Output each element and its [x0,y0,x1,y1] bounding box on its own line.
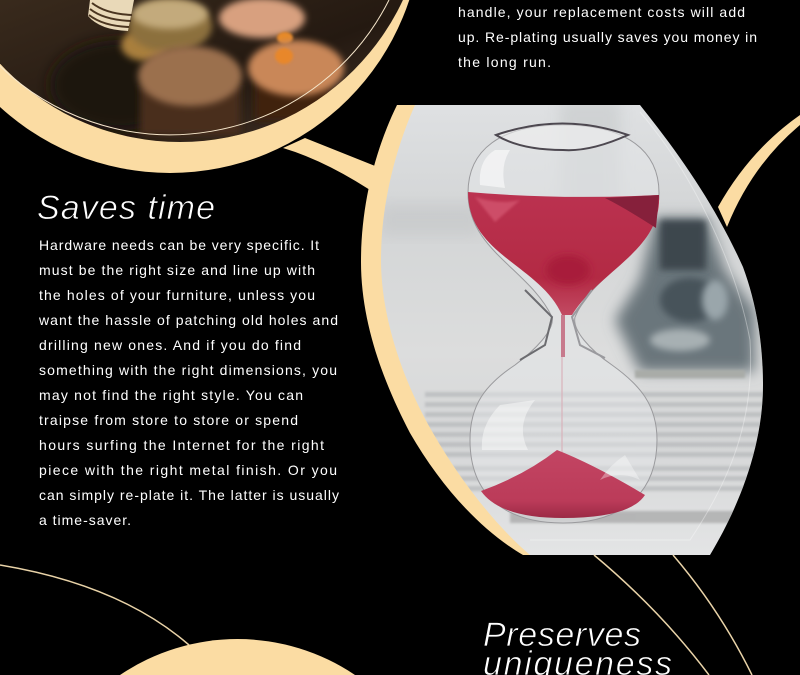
newspaper text stripes [425,392,770,491]
rim [496,124,628,150]
blurred newspaper top [560,105,620,130]
text: saves time body: traipse from store to store or spend [39,412,298,428]
text: saves time body: must be the right size and line up with [39,262,315,278]
text: top right body [458,4,757,70]
cream circle bottom [120,639,355,675]
photo: hourglass [370,100,770,560]
thin line right 2 [673,555,752,675]
connector band [283,138,385,200]
text: top right body: handle, your replacement costs will add [458,4,745,20]
cream crescent right of lens [718,115,800,227]
text: top right body: up. Re-plating usually saves you money in [458,29,757,45]
glass bulbs [468,125,659,523]
hourglass [468,124,659,523]
text: saves time body: can simply re-plate it. The latter is usually [39,487,339,503]
bottom sand [481,450,645,518]
blurred plant [615,218,755,378]
thin line left [0,565,189,645]
text: saves time body: the holes of your furniture, unless you [39,287,315,303]
text: saves time body: something with the right dimensions, you [39,362,337,378]
heading: preserves uniqueness [483,616,672,675]
text: saves time body [38,237,339,528]
heading: preserves uniqueness: Preserves [483,616,641,654]
text: saves time body: may not find the right style. You can [39,387,303,403]
text: saves time body: drilling new ones. And if you do find [39,337,301,353]
thin arc on lens [530,112,751,540]
thin line right 1 [594,555,709,675]
photo: coins [0,0,420,150]
text: saves time body: want the hassle of patching old holes and [38,312,338,328]
coin stack [88,0,134,31]
thin arc on coins [0,0,389,135]
text: saves time body: piece with the right metal finish. Or you [39,462,337,478]
top sand [468,192,659,315]
decorative cream circle around coins [0,0,422,200]
cream crescent left of lens [361,105,560,555]
text: saves time body: hours surfing the Internet for the right [39,437,324,453]
sand stream [561,315,565,357]
text: top right body: the long run. [458,54,551,70]
glass highlights [480,150,510,188]
text: saves time body: Hardware needs can be very specific. It [39,237,319,253]
neck [520,290,552,360]
text: saves time body: a time-saver. [39,512,131,528]
heading: saves time: Saves time [37,189,215,227]
